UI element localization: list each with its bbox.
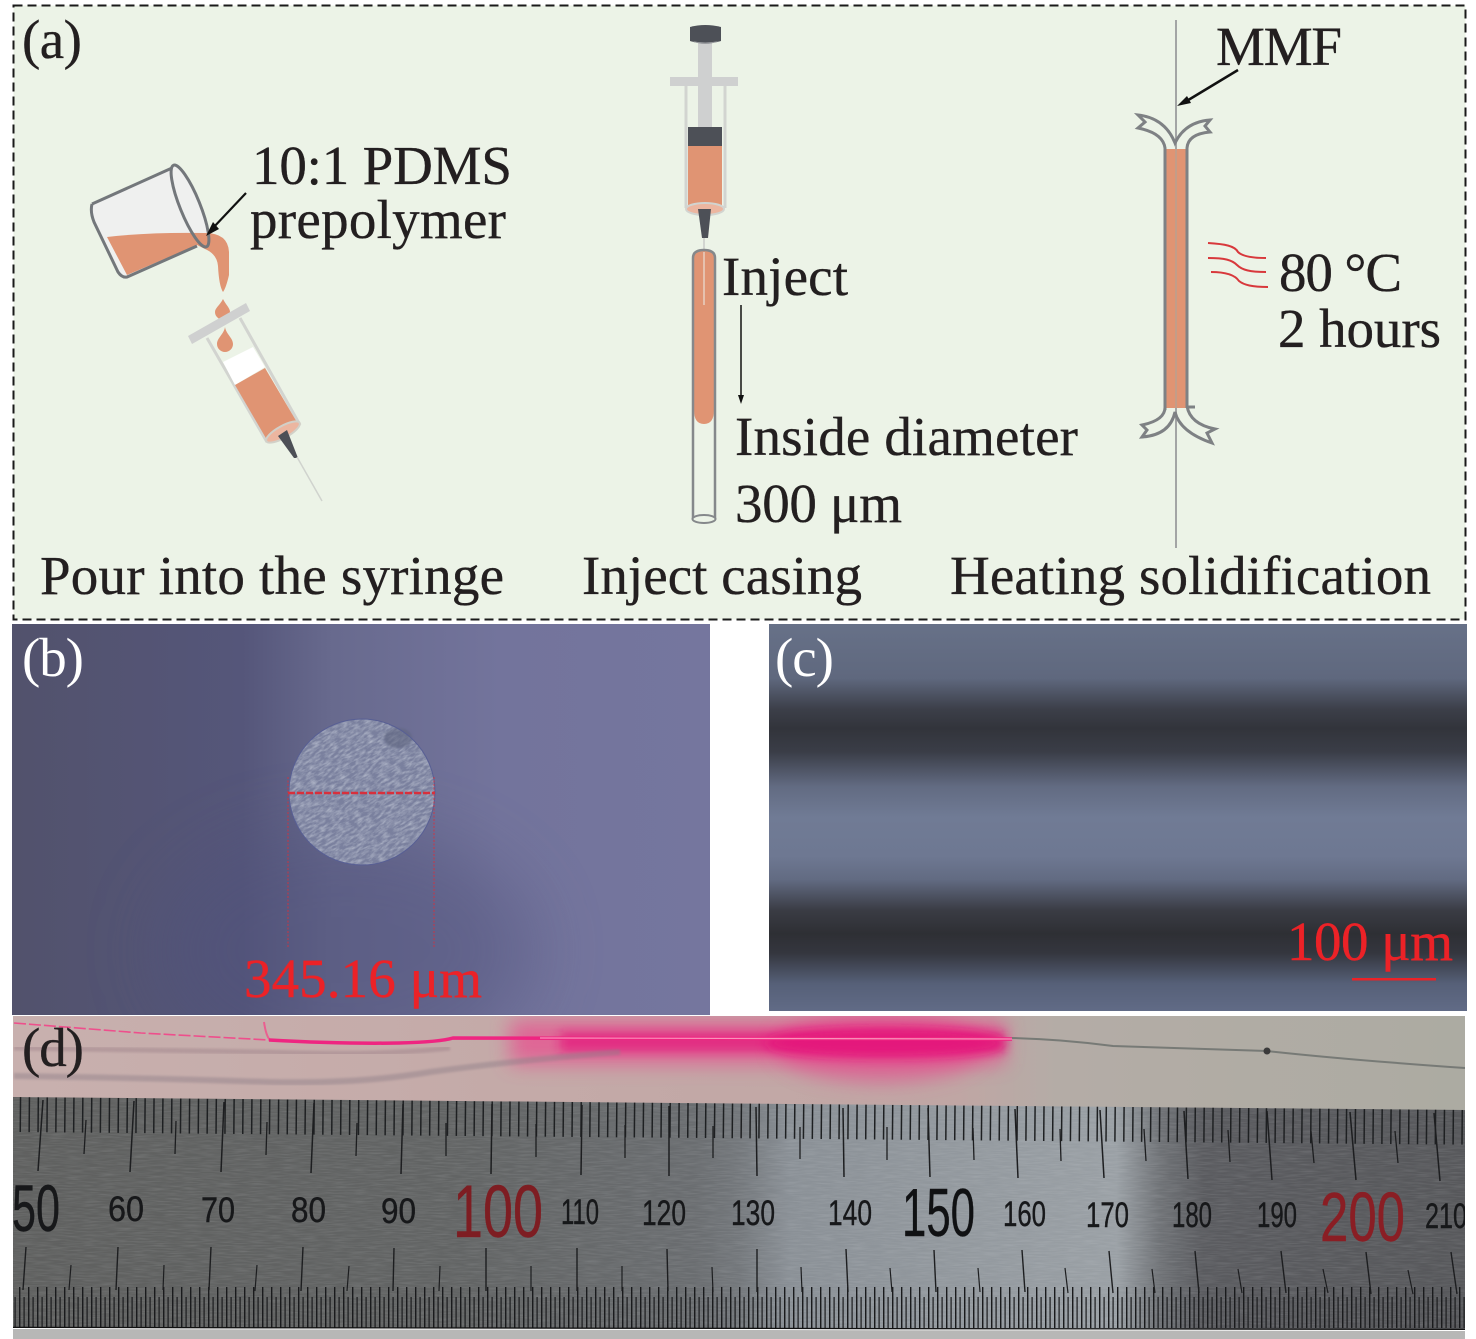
bottom scale ticks (13, 1247, 1465, 1328)
ruler numerals: 60 (108, 1190, 144, 1229)
panel a: fabrication steps (14, 6, 1466, 620)
label: inject: Inject (722, 246, 848, 307)
icon: beaker pouring into syringe (91, 161, 322, 501)
arrow: inject direction (738, 305, 744, 404)
ruler numerals: 100 (453, 1170, 543, 1253)
label: heating conditions (1278, 242, 1441, 359)
ruler numerals: 130 (731, 1194, 775, 1233)
ruler numerals: 190 (1257, 1196, 1297, 1235)
label: 10:1 PDMS prepolymer: 10:1 PDMS (252, 135, 512, 196)
ruler numerals: 120 (642, 1194, 686, 1233)
panel d: glowing fiber photo (13, 1016, 1465, 1110)
ruler body (13, 1095, 1465, 1331)
label: heating conditions: 2 hours (1278, 298, 1441, 359)
measurement label: 345.16 μm (244, 948, 482, 1009)
bottom ruler edge (13, 1328, 1465, 1330)
panel label c: (c) (775, 627, 834, 688)
ruler numerals: 150 (902, 1175, 975, 1251)
ruler numerals: 200 (1320, 1178, 1405, 1256)
icon: casing tube with prepolymer (692, 250, 716, 523)
label: MMF: MMF (1216, 16, 1342, 77)
panel label a: (a) (22, 9, 82, 70)
ruler numerals: 70 (201, 1191, 235, 1230)
label: inside diameter: Inside diameter (735, 406, 1078, 467)
top scale ticks (13, 1097, 1476, 1181)
icon: heated tube with fiber (1138, 20, 1215, 548)
strip below ruler (13, 1329, 1465, 1339)
ruler numerals: 160 (1003, 1195, 1046, 1234)
micrograph bands (769, 624, 1467, 1011)
label: inside diameter (735, 406, 1078, 534)
ruler numerals: 180 (1172, 1196, 1212, 1235)
panel label b: (b) (22, 627, 84, 688)
icon: injection syringe (670, 25, 738, 250)
panel a background (14, 6, 1466, 620)
micrograph background (12, 624, 710, 1015)
scale bar: 100 μm (1287, 911, 1453, 972)
caption: heating solidification: Heating solidification (950, 545, 1431, 606)
label: heating conditions: 80 °C (1279, 242, 1402, 303)
ruler numerals: 110 (561, 1193, 599, 1232)
label: inside diameter: 300 μm (735, 473, 902, 534)
fiber cross section (288, 718, 436, 866)
arrow: prepolymer pointer (206, 193, 246, 236)
label: 10:1 PDMS prepolymer (250, 135, 512, 250)
diameter measurement lines (288, 777, 435, 948)
ruler numerals: 90 (381, 1192, 416, 1231)
ruler numerals: 80 (291, 1191, 326, 1230)
panel c: side-view micrograph (769, 624, 1467, 1011)
icon: heat waves (1208, 243, 1268, 287)
ruler (12, 1095, 1476, 1331)
panel label d: (d) (22, 1017, 84, 1078)
ruler numerals: 50 (12, 1171, 60, 1245)
ruler numerals: 140 (828, 1194, 872, 1233)
panel b: cross-section micrograph (12, 624, 710, 1015)
ruler numerals: 170 (1086, 1196, 1129, 1235)
fiber and laser glow (14, 1010, 1465, 1082)
caption: pour into the syringe: Pour into the syringe (40, 545, 504, 606)
label: 10:1 PDMS prepolymer: prepolymer (250, 189, 506, 250)
caption: inject casing: Inject casing (582, 545, 862, 606)
photo background (13, 1016, 1465, 1116)
arrow: MMF pointer (1177, 70, 1238, 106)
ruler numerals (14, 1184, 1465, 1242)
